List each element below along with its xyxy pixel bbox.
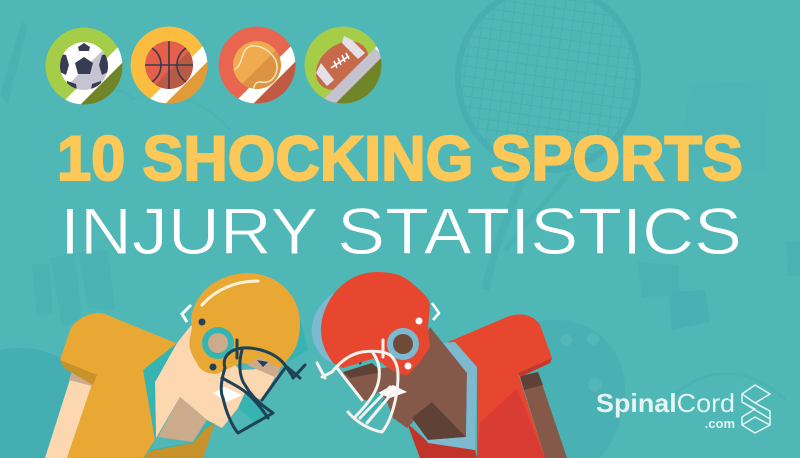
left player	[45, 273, 308, 458]
logo icon	[742, 385, 770, 433]
logo wordmark: SpinalCord	[596, 388, 735, 418]
title line 1: 10 SHOCKING SPORTS	[57, 124, 743, 194]
right collar	[410, 342, 477, 450]
icon: soccer ball	[46, 28, 122, 104]
right neck and face	[342, 327, 467, 437]
left helmet	[280, 310, 308, 362]
faint equipment: left bar	[0, 20, 28, 105]
left jersey	[60, 313, 176, 458]
right helmet	[312, 293, 333, 364]
right arm	[520, 372, 567, 458]
icon: basketball	[130, 26, 208, 104]
faint equipment: shin guards	[32, 250, 115, 326]
left collar	[143, 343, 214, 452]
left arm	[45, 373, 95, 458]
logo domain: .com	[705, 416, 735, 431]
right facemask	[317, 340, 398, 432]
icon: tennis ball	[218, 26, 296, 104]
left neck and chest	[155, 323, 280, 438]
left facemask	[221, 340, 305, 433]
faint equipment: gloves outline	[78, 90, 230, 130]
faint equipment: right mitts	[638, 262, 680, 298]
faint equipment: right panel	[678, 80, 768, 170]
faint equipment: lower right arc	[670, 374, 785, 400]
icon: american football	[304, 26, 382, 104]
left face shadow and eye	[247, 357, 280, 378]
title line 2: INJURY STATISTICS	[60, 194, 742, 268]
right jersey	[448, 314, 552, 458]
right player	[312, 272, 567, 458]
logo: SpinalCord.com	[596, 385, 770, 433]
faint equipment: left round shade	[0, 348, 90, 458]
faint tennis racket	[458, 0, 638, 290]
faint equipment: bowling ball	[485, 320, 625, 458]
